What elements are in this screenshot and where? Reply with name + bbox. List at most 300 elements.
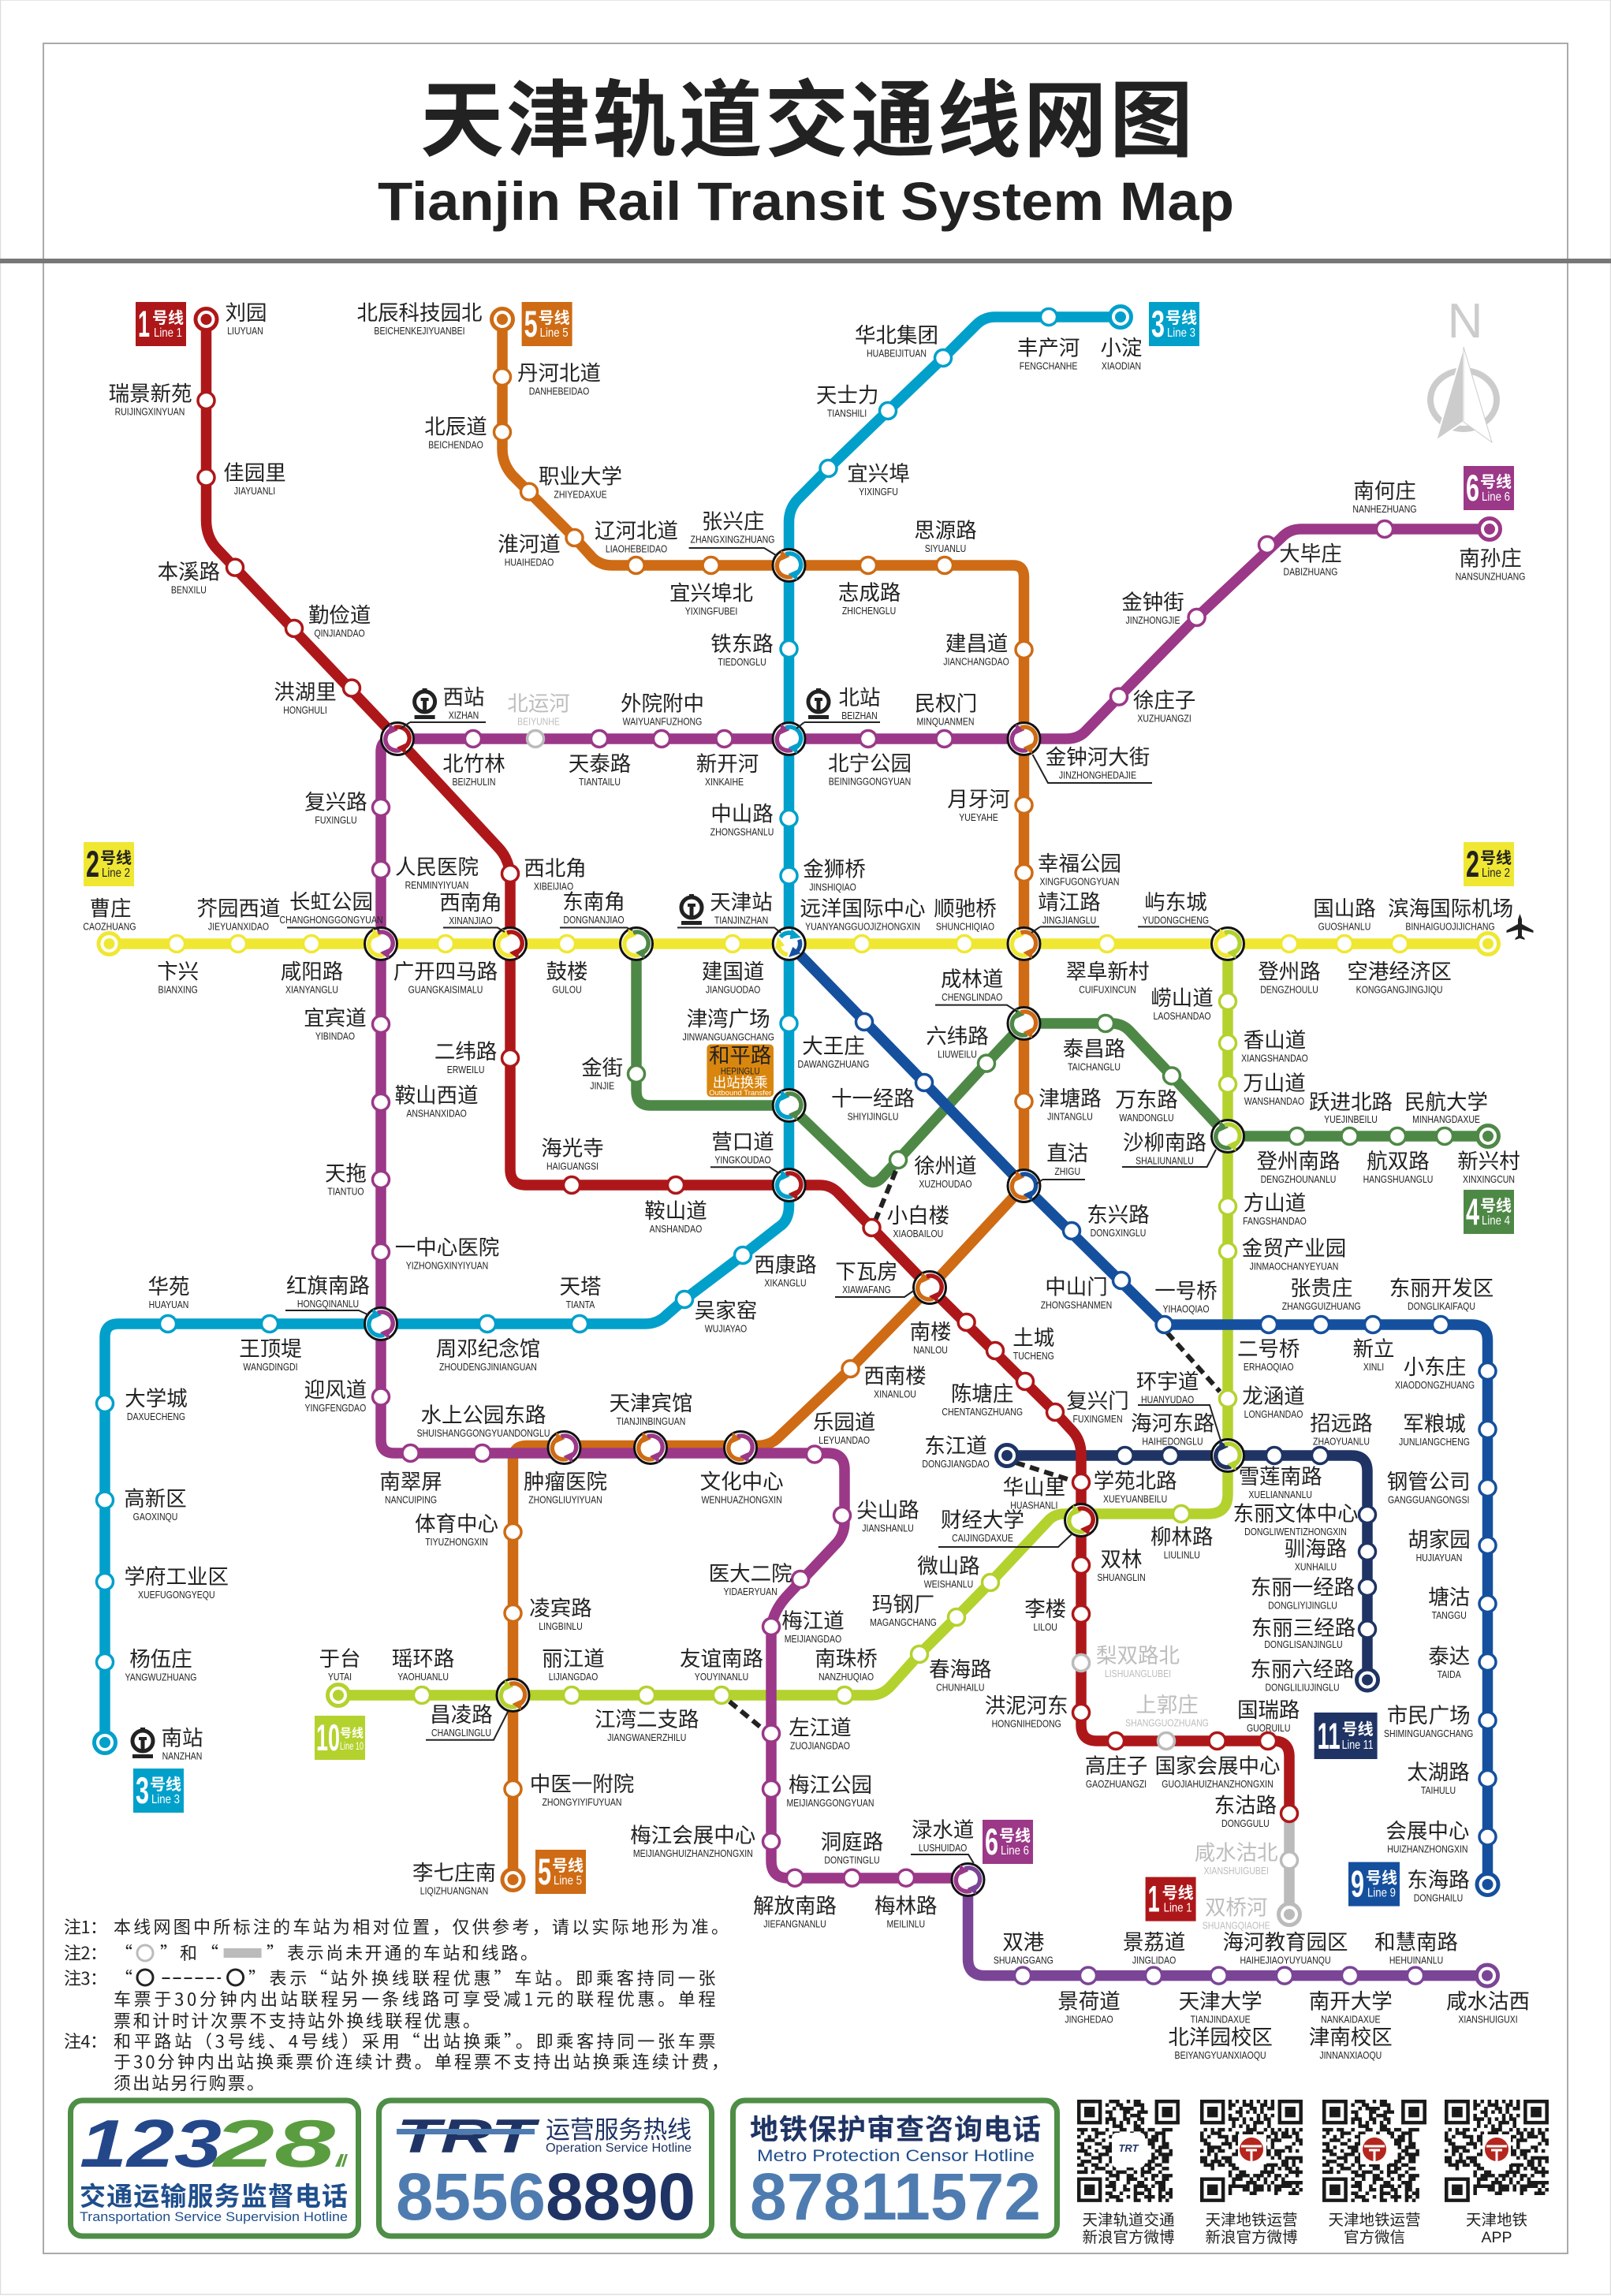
label: 吴家窑: 吴家窑 (695, 1299, 757, 1323)
label: 北运河: BEIYUNHE (517, 715, 560, 728)
label: 津南校区 (1309, 2026, 1393, 2061)
label: 梅江会展中心: MEIJIANGHUIZHANZHONGXIN (633, 1847, 753, 1859)
label: 顺驰桥: SHUNCHIQIAO (936, 920, 994, 933)
label: 高新区 (124, 1487, 187, 1523)
label: 华苑: HUAYUAN (149, 1299, 188, 1310)
label: 南珠桥 (815, 1647, 878, 1683)
label: 丽江道: LIJIANGDAO (549, 1671, 598, 1683)
label: 东沽路: DONGGULU (1221, 1817, 1270, 1829)
label: 龙涵道 (1242, 1385, 1305, 1420)
label: 洪湖里: HONGHULI (283, 704, 327, 716)
label: 李七庄南 (412, 1862, 496, 1897)
panel: metro protection hotline (733, 2100, 1057, 2236)
label: 雪莲南路: XUELIANNANLU (1248, 1489, 1312, 1500)
label: 辽河北道 (595, 519, 678, 555)
label: 和慧南路 (1374, 1931, 1458, 1966)
label: 崂山道 (1150, 986, 1214, 1022)
label: 曹庄 (83, 897, 136, 933)
label: 勤俭道 (308, 604, 371, 639)
label: 驯海路 (1285, 1538, 1347, 1573)
label: 铁东路: 铁东路 (710, 632, 774, 656)
label: 渌水道: LUSHUIDAO (919, 1842, 967, 1854)
label: 新立: 新立 (1353, 1337, 1394, 1361)
label: 东江道: DONGJIANGDAO (922, 1458, 990, 1470)
label: 登州南路: 登州南路 (1257, 1150, 1341, 1173)
label: 芥园西道 (197, 897, 281, 933)
label: 淮河道 (498, 533, 561, 568)
badge: line 2 right: 号线 (1480, 849, 1512, 867)
label: 瑞景新苑: RUIJINGXINYUAN (115, 405, 185, 418)
label: 东丽开发区: 东丽开发区 (1389, 1277, 1494, 1300)
label: 本溪路: BENXILU (171, 583, 207, 596)
label: 红旗南路: 红旗南路 (286, 1274, 370, 1298)
label: 咸阳路 (281, 960, 343, 996)
label: 陈塘庄 (942, 1382, 1023, 1418)
interchange: 张兴庄 (773, 549, 805, 582)
route: line 10 lime (338, 944, 1228, 1695)
label box: 和平路 (707, 1044, 774, 1098)
badge: line 5 top (522, 302, 572, 346)
stations: line 1 (198, 393, 1298, 1821)
badge: line 3 top: Line 3 (1167, 326, 1195, 340)
label: 杨伍庄: 杨伍庄 (129, 1648, 192, 1672)
label: 六纬路: 六纬路 (926, 1025, 989, 1049)
label: 太湖路: 太湖路 (1407, 1761, 1470, 1784)
notes block: 表示“站外换线联程优惠”车站。即乘客持同一张 (270, 1965, 716, 1990)
label: 泰达: TAIDA (1438, 1668, 1461, 1680)
label: 建昌道: JIANCHANGDAO (943, 655, 1009, 668)
label: 勤俭道: 勤俭道 (308, 604, 371, 628)
label: 南翠屏 (379, 1470, 442, 1506)
label: 登州南路: DENGZHOUNANLU (1261, 1173, 1336, 1185)
label: 沙柳南路 (1123, 1131, 1206, 1167)
transfer dashes (729, 1171, 1220, 1731)
badge: line 1 top: Line 1 (154, 326, 182, 340)
badge: line 6 bottom: 号线 (999, 1827, 1031, 1845)
label: 景荔道 (1123, 1931, 1185, 1966)
label: 香山道: 香山道 (1244, 1028, 1306, 1052)
label: 民航大学 (1404, 1090, 1488, 1125)
stations: line 6 (372, 520, 1393, 1886)
label: 崂山道: LAOSHANDAO (1153, 1010, 1211, 1022)
label: 春海路 (929, 1657, 992, 1694)
route: line 9 blue (789, 944, 1487, 1884)
badge: line 6 top: 号线 (1480, 473, 1512, 491)
label: 复兴路: FUXINGLU (315, 814, 357, 826)
label: 解放南路: JIEFANGNANLU (763, 1918, 826, 1930)
header divider (0, 259, 1611, 263)
label: 东海路 (1407, 1868, 1470, 1904)
label: 万山道 (1243, 1072, 1306, 1107)
label: 志成路 (838, 581, 901, 617)
label: 会展中心: 会展中心 (1385, 1820, 1469, 1843)
label: 万东路 (1115, 1088, 1178, 1124)
label: 北辰道: 北辰道 (424, 415, 487, 438)
label: 天津大学: 天津大学 (1179, 1990, 1262, 2014)
label: 瑶环路: YAOHUANLU (397, 1671, 449, 1683)
label: 小淀 (1101, 336, 1142, 372)
label: 幸福公园: XINGFUGONGYUAN (1039, 875, 1120, 888)
label: 一中心医院 (395, 1236, 499, 1272)
label: 津湾广场 (682, 1008, 774, 1043)
label: 上郭庄: 上郭庄 (1136, 1694, 1199, 1717)
label: 高新区: GAOXINQU (133, 1511, 177, 1523)
label: 中医一附院 (530, 1772, 634, 1808)
label: 江湾二支路: 江湾二支路 (595, 1708, 699, 1731)
label: 人民医院: 人民医院 (395, 855, 479, 879)
badge: line 6 bottom: Line 6 (1001, 1844, 1029, 1858)
label: 梅江会展中心 (630, 1824, 755, 1859)
label: 志成路: 志成路 (838, 581, 901, 605)
label: 学苑北路: 学苑北路 (1094, 1470, 1177, 1493)
label: 李楼: LILOU (1034, 1621, 1057, 1633)
label: 屿东城 (1143, 891, 1209, 926)
label: 民航大学: 民航大学 (1404, 1090, 1488, 1114)
label: 微山路: 微山路 (917, 1555, 980, 1578)
label: 民航大学: MINHANGDAXUE (1412, 1113, 1480, 1125)
label: 玛钢厂 (870, 1593, 937, 1628)
label: 梅江公园: MEIJIANGGONGYUAN (786, 1797, 874, 1809)
label: 杨伍庄 (125, 1648, 196, 1683)
label: 北辰科技园北: 北辰科技园北 (356, 301, 483, 325)
label: 鞍山道 (644, 1199, 707, 1235)
label: 远洋国际中心: YUANYANGGUOJIZHONGXIN (805, 920, 920, 933)
panel: metro protection hotline: Metro Protection Censor Hotline (757, 2147, 1035, 2165)
label: 天津站 (710, 891, 773, 926)
label: 海光寺 (541, 1137, 604, 1172)
label: 国瑞路 (1237, 1698, 1300, 1734)
label: 小淀: XIAODIAN (1102, 360, 1141, 372)
label: 南何庄: NANHEZHUANG (1352, 503, 1417, 515)
label: 金钟河大街: JINZHONGHEDAJIE (1059, 769, 1136, 781)
notes block: ” (160, 1940, 177, 1965)
label: 金狮桥: JINSHIQIAO (809, 881, 856, 893)
label: 一中心医院: 一中心医院 (395, 1236, 499, 1259)
label: 财经大学: CAIJINGDAXUE (952, 1532, 1013, 1544)
interchange: 成林道 (1008, 1008, 1040, 1039)
label: 天士力: TIANSHILI (827, 407, 867, 419)
label: 勤俭道: QINJIANDAO (314, 627, 365, 639)
label: 新立 (1353, 1337, 1394, 1373)
label: 李楼 (1024, 1597, 1066, 1633)
label: 中山门: 中山门 (1045, 1276, 1108, 1299)
label: 迎风道: YINGFENGDAO (305, 1402, 366, 1414)
badge: line 6 bottom (983, 1820, 1033, 1864)
label box: 和平路: 和平路 (709, 1044, 771, 1068)
label: 营口道: YINGKOUDAO (714, 1154, 771, 1166)
label: 十一经路: 十一经路 (831, 1087, 915, 1111)
label: 军粮城: JUNLIANGCHENG (1399, 1436, 1470, 1448)
label: 小白楼: 小白楼 (887, 1204, 949, 1228)
label: 北运河 (507, 692, 570, 728)
label: 梨双路北 (1096, 1644, 1180, 1679)
title: English: Tianjin Rail Transit System Map (378, 171, 1234, 232)
label: 乐园道: 乐园道 (813, 1411, 875, 1434)
label: 航双路: 航双路 (1367, 1150, 1430, 1173)
label: 曹庄: CAOZHUANG (83, 920, 136, 933)
label: 双桥河 (1203, 1896, 1270, 1932)
icon: airplane (1506, 914, 1533, 940)
label: 中医一附院: ZHONGYIYIFUYUAN (542, 1796, 622, 1808)
compass: N (1448, 294, 1482, 348)
label: 国山路: 国山路 (1313, 897, 1376, 921)
label: 跃进北路 (1309, 1090, 1393, 1125)
badge: line 3 top: 号线 (1165, 309, 1197, 327)
label: 东丽开发区 (1389, 1277, 1494, 1312)
label: 淮河道: HUAIHEDAO (505, 556, 554, 568)
notes block: 票和计时计次票不支持站外换线联程优惠。 (114, 2007, 480, 2033)
label: 南楼: NANLOU (913, 1344, 948, 1356)
label: 天泰路: 天泰路 (569, 752, 631, 776)
label: 迎风道 (304, 1378, 367, 1414)
label: 小东庄: 小东庄 (1404, 1355, 1466, 1379)
QR: metro APP (1445, 2100, 1549, 2246)
label: 西南角: XINANJIAO (449, 915, 493, 926)
station callout leader lines (285, 548, 1221, 1863)
label: 南何庄: 南何庄 (1353, 479, 1416, 503)
label: 十一经路 (831, 1087, 915, 1123)
label: 学府工业区: XUEFUGONGYEQU (138, 1589, 215, 1601)
label: 屿东城: 屿东城 (1144, 891, 1207, 915)
label: 土城: TUCHENG (1013, 1350, 1054, 1362)
label: 登州路 (1258, 960, 1321, 996)
notes block: “ (115, 1940, 132, 1965)
QR: metro APP: APP (1481, 2229, 1512, 2246)
notes block: 须出站另行购票。 (114, 2070, 264, 2095)
route: line 6 south branch (968, 1880, 1487, 1976)
label: 招远路: ZHAOYUANLU (1313, 1435, 1370, 1448)
label: 迎风道: 迎风道 (304, 1378, 367, 1402)
label: 思源路: 思源路 (914, 519, 977, 542)
panel: operation service hotline: 8556 (396, 2160, 546, 2234)
label: 月牙河: YUEYAHE (959, 811, 998, 823)
label: 天士力 (816, 383, 878, 419)
label: 咸阳路: XIANYANGLU (285, 983, 338, 996)
interchange: 红旗南路 (364, 1307, 397, 1340)
stations: line 6 south branch (1014, 1967, 1424, 1984)
label: 复兴路 (304, 790, 367, 826)
label: 淮河道: 淮河道 (498, 533, 561, 557)
interchange: 渌水道 (952, 1864, 984, 1895)
label: 建国道 (702, 960, 764, 996)
notes block: 注1： (64, 1914, 107, 1939)
label: 乐园道: LEYUANDAO (819, 1434, 870, 1446)
label: 南何庄 (1352, 479, 1417, 515)
label: 西北角: 西北角 (524, 856, 587, 880)
label: 长虹公园: CHANGHONGGONGYUAN (280, 914, 382, 926)
label: 西康路: XIKANGLU (764, 1277, 807, 1289)
badge: line 1 top (136, 302, 186, 346)
badge: line 1 bottom: 号线 (1162, 1884, 1194, 1903)
label: 友谊南路: YOUYINANLU (695, 1671, 748, 1683)
label: 环宇道 (1136, 1370, 1199, 1406)
label: 招远路 (1310, 1411, 1373, 1448)
label: 李七庄南: 李七庄南 (412, 1862, 496, 1885)
label: 金钟街 (1121, 591, 1184, 626)
label: 西站: 西站 (443, 686, 484, 710)
label: 南楼: 南楼 (910, 1321, 951, 1344)
label: 天津站: TIANJINZHAN (714, 914, 768, 926)
label: 新开河: XINKAIHE (705, 776, 744, 788)
label: 月牙河 (947, 788, 1010, 823)
route: line 6 purple (381, 529, 1490, 1878)
label: 尖山路: 尖山路 (856, 1499, 919, 1523)
label: 驯海路: 驯海路 (1285, 1538, 1347, 1561)
label: 东丽文体中心: 东丽文体中心 (1233, 1502, 1358, 1526)
label: 乐园道 (813, 1411, 875, 1446)
badge: line 5 bottom: 5 (538, 1851, 551, 1892)
label: 友谊南路: 友谊南路 (680, 1647, 763, 1671)
label: 医大二院: YIDAERYUAN (724, 1586, 778, 1597)
label: 左江道: 左江道 (789, 1716, 852, 1739)
label: 瑶环路: 瑶环路 (392, 1647, 454, 1671)
label: 周邓纪念馆 (436, 1337, 540, 1373)
label: 凌宾路: LINGBINLU (539, 1620, 583, 1632)
label: 建国道: 建国道 (702, 960, 764, 984)
badge: line 2 left (84, 842, 134, 886)
label: 徐庄子 (1133, 689, 1195, 725)
label: 中山路 (710, 803, 774, 838)
label: 职业大学: 职业大学 (539, 465, 622, 489)
label: 靖江路 (1038, 891, 1101, 926)
label: 下瓦房 (835, 1260, 898, 1295)
label: 航双路 (1363, 1150, 1433, 1185)
label: 国瑞路: 国瑞路 (1237, 1698, 1300, 1722)
label: 津塘路 (1039, 1087, 1102, 1123)
label: 昌凌路: CHANGLINGLU (431, 1727, 491, 1739)
label: 雪莲南路: 雪莲南路 (1239, 1465, 1322, 1489)
label: 远洋国际中心 (800, 897, 926, 933)
badge: line 6 bottom: 6 (985, 1821, 998, 1862)
label: 东兴路: DONGXINGLU (1091, 1227, 1146, 1239)
label: 天津站: 天津站 (710, 891, 773, 915)
label: 渌水道: 渌水道 (912, 1818, 974, 1842)
label: 北竹林: BEIZHULIN (453, 776, 495, 788)
label: 新开河: 新开河 (696, 752, 759, 776)
label: 崂山道: 崂山道 (1150, 986, 1214, 1010)
label: 市民广场: SHIMINGUANGCHANG (1384, 1728, 1473, 1739)
label: 职业大学 (539, 465, 622, 501)
label: 左江道: ZUOJIANGDAO (790, 1739, 850, 1752)
label: 双港: SHUANGGANG (994, 1955, 1053, 1966)
label: 西南楼: XINANLOU (874, 1388, 916, 1400)
label: 景荔道: JINGLIDAO (1132, 1955, 1176, 1966)
label: 空港经济区: 空港经济区 (1347, 960, 1452, 984)
label: 金狮桥: 金狮桥 (803, 858, 866, 882)
badge: line 5 top: Line 5 (540, 326, 569, 340)
label: 南翠屏: NANCUIPING (385, 1493, 437, 1506)
label: 大学城 (125, 1387, 188, 1422)
label: 南翠屏: 南翠屏 (379, 1470, 442, 1493)
label: 军粮城 (1399, 1412, 1470, 1448)
label: 芥园西道: 芥园西道 (197, 897, 281, 921)
label: 玛钢厂: 玛钢厂 (872, 1593, 934, 1616)
label: 滨海国际机场: 滨海国际机场 (1388, 897, 1513, 921)
stations: line 4 green (628, 1016, 1453, 1168)
label: 学府工业区 (125, 1565, 229, 1601)
label: 津湾广场: 津湾广场 (687, 1008, 770, 1031)
label: 肿瘤医院: 肿瘤医院 (524, 1470, 607, 1493)
label: 二号桥: ERHAOQIAO (1244, 1361, 1294, 1373)
label: 中山路: ZHONGSHANLU (710, 826, 774, 838)
badge: line 2 right: 2 (1466, 843, 1479, 885)
label: 高庄子 (1085, 1754, 1147, 1790)
label: 北洋园校区 (1168, 2026, 1273, 2061)
label: 东丽开发区: DONGLIKAIFAQU (1408, 1300, 1475, 1312)
label: 鼓楼: GULOU (552, 983, 582, 996)
panel: metro protection hotline: 地铁保护审查咨询电话 (750, 2113, 1041, 2145)
label: 铁东路: TIEDONGLU (718, 656, 766, 668)
label: 梅林路: MEILINLU (887, 1918, 925, 1930)
label: 张贵庄: 张贵庄 (1290, 1277, 1352, 1300)
QR: metro operation Weibo: 天津地铁运营 (1205, 2212, 1298, 2229)
label: 龙涵道: 龙涵道 (1242, 1385, 1305, 1408)
label: 海河东路 (1131, 1411, 1214, 1448)
label: 柳林路: 柳林路 (1150, 1526, 1214, 1549)
badge: line 9: Line 9 (1367, 1887, 1396, 1900)
label: 金钟街: 金钟街 (1121, 591, 1184, 614)
label: 医大二院 (709, 1562, 792, 1597)
label: 大学城: 大学城 (125, 1387, 188, 1411)
QR: Tianjin rail Weibo (1077, 2100, 1180, 2246)
label: 西康路 (754, 1254, 817, 1289)
label: 驯海路: XUNHAILU (1295, 1560, 1337, 1573)
route: line 1 unopened (1284, 1813, 1295, 1914)
label: 景荷道: 景荷道 (1057, 1990, 1121, 2014)
label: 南孙庄 (1456, 547, 1525, 583)
label: 远洋国际中心: 远洋国际中心 (800, 897, 926, 921)
label: 雪莲南路 (1239, 1465, 1322, 1500)
badge: line 6 top (1464, 466, 1514, 510)
label: 西站 (443, 686, 484, 721)
label: 大毕庄: DABIZHUANG (1284, 565, 1337, 578)
badge: line 1 top: 号线 (152, 309, 184, 327)
notes block: 注2： (64, 1940, 107, 1965)
label: 上郭庄 (1125, 1694, 1209, 1729)
stations: unopened (527, 730, 1298, 1869)
label: 东丽三经路: 东丽三经路 (1251, 1616, 1356, 1640)
label: 外院附中: WAIYUANFUZHONG (623, 715, 702, 728)
label: 丹河北道: 丹河北道 (517, 361, 601, 385)
interchange: 靖江路 (1008, 927, 1040, 960)
label: 环宇道: 环宇道 (1136, 1370, 1199, 1394)
notes block: “ (115, 1965, 132, 1990)
label: 天泰路: TIANTAILU (579, 776, 621, 788)
label: 北站: 北站 (839, 686, 880, 710)
label: 梅江公园 (786, 1773, 874, 1809)
label: 胡家园: HUJIAYUAN (1416, 1552, 1462, 1564)
label: 西北角: XIBEIJIAO (534, 880, 573, 893)
icon: rail Tianjinzhan (681, 894, 702, 925)
label: 万山道: WANSHANDAO (1244, 1095, 1304, 1107)
label: 张兴庄: 张兴庄 (702, 509, 764, 533)
label: 景荷道: JINGHEDAO (1065, 2014, 1113, 2026)
label: 杨伍庄: YANGWUZHUANG (125, 1671, 196, 1683)
label: 华北集团: 华北集团 (855, 323, 938, 347)
label: 财经大学: 财经大学 (941, 1508, 1024, 1532)
label: 和慧南路: 和慧南路 (1374, 1931, 1458, 1955)
label: 长虹公园: 长虹公园 (289, 890, 373, 914)
badge: line 6 top: 6 (1466, 467, 1479, 509)
label: 宜兴埠北: 宜兴埠北 (669, 582, 753, 606)
label: 吴家窑: WUJIAYAO (705, 1322, 747, 1335)
label: 西康路: 西康路 (754, 1254, 817, 1277)
interchange: 屿东城 (1211, 927, 1244, 960)
interchange: 西站 (382, 722, 413, 755)
panel: 12328 hotline: 123 (80, 2107, 222, 2182)
label: 国家会展中心: GUOJIAHUIZHANZHONGXIN (1162, 1778, 1274, 1790)
label: 友谊南路 (680, 1647, 763, 1683)
